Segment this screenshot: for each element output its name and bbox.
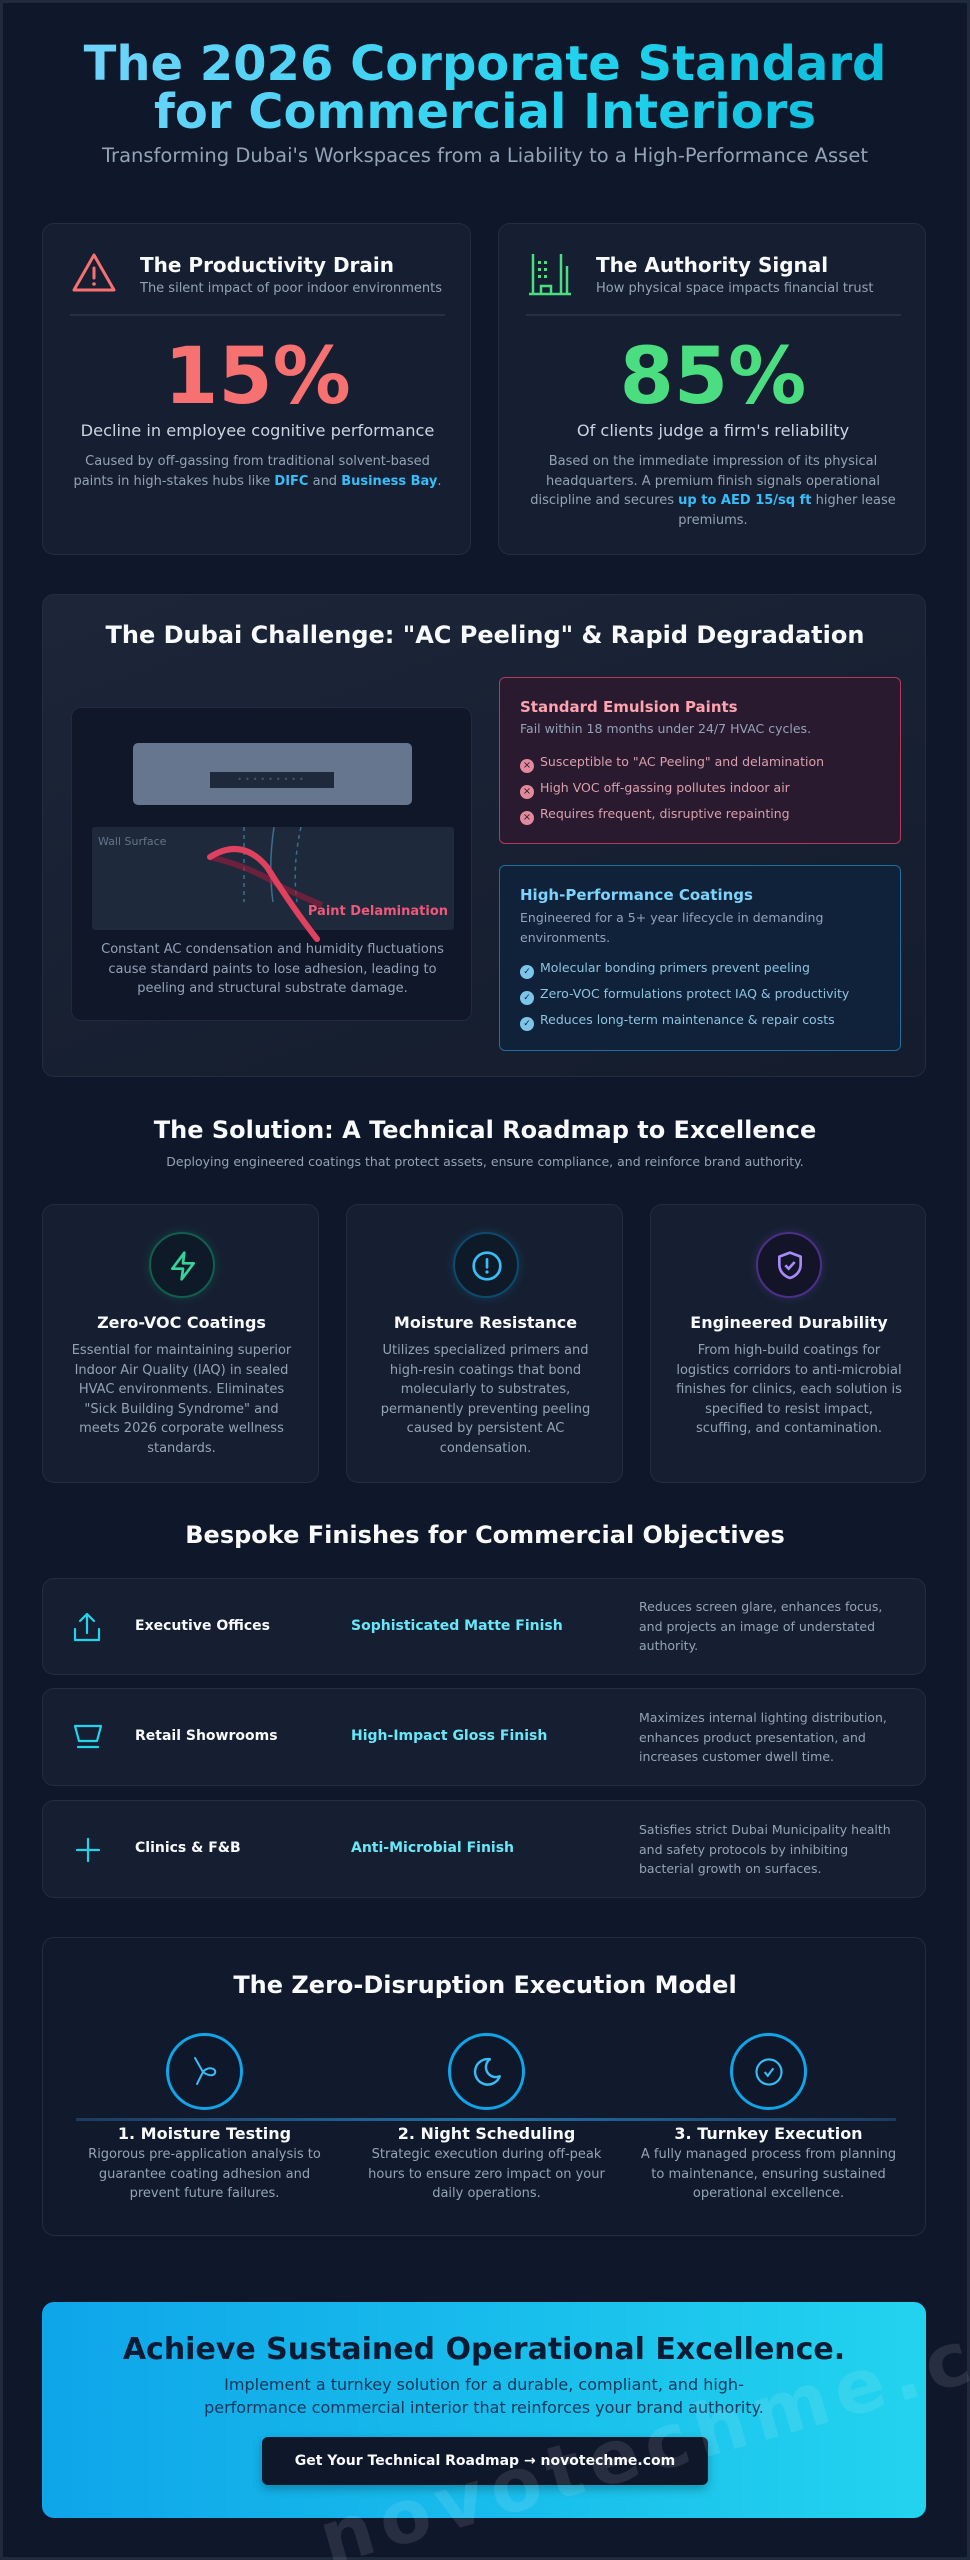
icon: upload: [74, 1612, 100, 1642]
panel: engineered durability: scuffing, and contamination.: [696, 1421, 882, 1436]
icon: warning triangle: [72, 253, 116, 292]
callout: standard emulsion: [499, 677, 901, 844]
button: [262, 2437, 708, 2485]
icon: check circle: [730, 2033, 807, 2110]
callout: standard emulsion: Requires frequent, disruptive repainting: [540, 806, 790, 821]
text block: Implement a turnkey solution for a durable, compliant, and high-: [224, 2375, 744, 2394]
panel: productivity drain: Decline in employee cognitive performance: [81, 421, 434, 440]
callout: high-performance coatings: [499, 865, 901, 1051]
caption: Constant AC condensation and humidity fluctuations: [101, 942, 444, 957]
panel: moisture resistance: molecularly to substrates,: [401, 1382, 570, 1397]
label: paint delamination: Paint Delamination: [308, 904, 448, 919]
panel: moisture resistance: [346, 1204, 623, 1483]
text block: premiums.: [678, 512, 748, 528]
panel: authority signal: How physical space impacts financial trust: [596, 281, 874, 296]
callout: standard emulsion: ×: [523, 760, 531, 771]
wall surface: Wall Surface: [98, 835, 166, 848]
text block: Caused by off-gassing from traditional solvent-based: [85, 454, 430, 469]
step 3: [641, 2033, 896, 2201]
step 1: guarantee coating adhesion and: [99, 2166, 310, 2182]
step 1: prevent future failures.: [130, 2186, 279, 2201]
callout: standard emulsion: Susceptible to "AC Peeling" and delamination: [540, 754, 824, 769]
heading: solution: The Solution: A Technical Roadmap to Excellence: [154, 1116, 816, 1144]
callout: high-performance coatings: High-Performance Coatings: [520, 886, 753, 904]
step 2: hours to ensure zero impact on your: [368, 2166, 605, 2182]
row: clinics: Clinics & F&B: [135, 1840, 241, 1856]
title: [0, 40, 970, 136]
panel: zero-voc: Zero-VOC Coatings: [97, 1313, 266, 1332]
panel: engineered durability: [650, 1204, 926, 1483]
text block: [204, 2375, 764, 2417]
icon: AC unit: [133, 743, 412, 805]
panel: productivity drain: The silent impact of poor indoor environments: [140, 281, 442, 296]
row: executive offices: Executive Offices: [135, 1618, 270, 1634]
text block: [73, 454, 442, 488]
step 1: 1. Moisture Testing: [118, 2124, 291, 2143]
heading: The Productivity Drain: [140, 253, 394, 277]
subtitle: solution: Deploying engineered coatings that protect assets, ensure compliance, and reinforce brand authority.: [166, 1154, 804, 1169]
panel: engineered durability: Engineered Durability: [690, 1313, 888, 1332]
timeline line: [76, 2118, 896, 2121]
callout: standard emulsion: ×: [523, 812, 531, 823]
icon: AC unit: •••••••••: [237, 775, 307, 784]
panel: zero-voc: Essential for maintaining superior: [72, 1343, 291, 1358]
callout: high-performance coatings: Reduces long-term maintenance & repair costs: [540, 1012, 835, 1027]
callout: high-performance coatings: environments.: [520, 930, 610, 945]
callout: high-performance coatings: ✓: [523, 967, 531, 977]
row: clinics: bacterial growth on surfaces.: [639, 1861, 821, 1876]
panel: dubai challenge: [42, 594, 926, 1077]
step 1: [88, 2033, 321, 2201]
row: retail showrooms: [42, 1688, 926, 1786]
illustration: AC peeling: [71, 707, 472, 1021]
panel: execution model: [42, 1937, 926, 2236]
icon: alert circle: [453, 1232, 519, 1298]
text block: [530, 454, 896, 528]
panel: engineered durability: finishes for clinics, each solution is: [676, 1382, 902, 1397]
icon: lightning: [149, 1232, 215, 1298]
row: retail showrooms: increases customer dwell time.: [639, 1749, 834, 1764]
callout: standard emulsion: High VOC off-gassing pollutes indoor air: [540, 780, 790, 795]
row: executive offices: authority.: [639, 1638, 698, 1653]
row: executive offices: [42, 1578, 926, 1675]
step 2: [368, 2033, 605, 2201]
caption: [101, 942, 444, 996]
panel: engineered durability: specified to resist impact,: [705, 1402, 873, 1416]
heading: The Authority Signal: [596, 253, 828, 277]
panel: moisture resistance: permanently preventing peeling: [381, 1402, 590, 1416]
icon: moisture: [166, 2033, 243, 2110]
text block: Based on the immediate impression of its physical: [549, 454, 877, 469]
title: for Commercial Interiors: [154, 84, 816, 140]
text block: headquarters. A premium finish signals operational: [546, 474, 880, 488]
heading: bespoke finishes: Bespoke Finishes for Commercial Objectives: [185, 1521, 785, 1549]
panel: moisture resistance: Utilizes specialized primers and: [383, 1343, 588, 1358]
heading: The Dubai Challenge: "AC Peeling" & Rapid Degradation: [106, 621, 864, 649]
row: retail showrooms: Maximizes internal lighting distribution,: [639, 1710, 887, 1725]
step 2: 2. Night Scheduling: [398, 2124, 575, 2143]
panel: zero-voc: meets 2026 corporate wellness: [79, 1421, 284, 1436]
row: executive offices: and projects an image of understated: [639, 1618, 875, 1634]
panel: zero-voc: standards.: [147, 1440, 216, 1456]
panel: engineered durability: From high-build coatings for: [698, 1343, 880, 1358]
panel: zero-voc: Indoor Air Quality (IAQ) in sealed: [75, 1362, 288, 1378]
text block: performance commercial interior that reinforces your brand authority.: [204, 2398, 764, 2417]
icon: moon: [448, 2033, 525, 2110]
row: clinics: Anti-Microbial Finish: [351, 1840, 514, 1856]
step 3: 3. Turnkey Execution: [674, 2124, 863, 2143]
panel: moisture resistance: condensation.: [440, 1440, 531, 1456]
panel: moisture resistance: caused by persistent AC: [407, 1421, 564, 1436]
callout: standard emulsion: Fail within 18 months under 24/7 HVAC cycles.: [520, 721, 811, 736]
callout: high-performance coatings: Engineered for a 5+ year lifecycle in demanding: [520, 910, 823, 925]
callout: standard emulsion: ×: [523, 786, 531, 797]
row: retail showrooms: Retail Showrooms: [135, 1728, 278, 1744]
button: Get Your Technical Roadmap → novotechme.com: [295, 2453, 675, 2469]
wall surface: [92, 827, 454, 930]
row: clinics: and safety protocols by inhibiting: [639, 1842, 848, 1856]
row: retail showrooms: High-Impact Gloss Finish: [351, 1728, 547, 1744]
callout: standard emulsion: Standard Emulsion Paints: [520, 698, 738, 716]
icon: plus: [76, 1838, 100, 1862]
step 3: to maintenance, ensuring sustained: [651, 2166, 886, 2182]
subtitle: Transforming Dubai's Workspaces from a Liability to a High-Performance Asset: [102, 144, 868, 167]
row: executive offices: Reduces screen glare, enhances focus,: [639, 1599, 882, 1614]
callout: high-performance coatings: ✓: [523, 1019, 531, 1029]
callout: high-performance coatings: Zero-VOC formulations protect IAQ & productivity: [540, 986, 849, 1001]
callout: high-performance coatings: ✓: [523, 993, 531, 1003]
icon: basket: [74, 1724, 102, 1748]
panel: productivity drain: [42, 223, 471, 555]
icon: shield: [756, 1232, 822, 1298]
panel: engineered durability: logistics corridors to anti-microbial: [676, 1362, 902, 1378]
row: clinics: [42, 1800, 926, 1898]
text block: discipline and secures up to AED 15/sq ft higher lease: [530, 493, 896, 508]
panel: zero-voc: "Sick Building Syndrome" and: [84, 1402, 279, 1416]
heading: Achieve Sustained Operational Excellence.: [123, 2332, 845, 2367]
caption: cause standard paints to lose adhesion, leading to: [108, 962, 437, 976]
panel: authority signal: [498, 223, 926, 555]
callout: high-performance coatings: Molecular bonding primers prevent peeling: [540, 960, 810, 975]
icon: building: [529, 254, 571, 296]
text block: paints in high-stakes hubs like DIFC and Business Bay.: [73, 474, 442, 488]
row: clinics: Satisfies strict Dubai Municipality health: [639, 1822, 891, 1837]
panel: moisture resistance: high-resin coatings that bond: [390, 1362, 581, 1378]
row: executive offices: Sophisticated Matte Finish: [351, 1618, 563, 1634]
step 2: Strategic execution during off-peak: [372, 2147, 601, 2162]
step 3: operational excellence.: [693, 2186, 844, 2201]
title: The 2026 Corporate Standard: [84, 36, 886, 92]
step 3: A fully managed process from planning: [641, 2147, 896, 2162]
heading: The Zero-Disruption Execution Model: [233, 1971, 737, 1999]
panel: moisture resistance: Moisture Resistance: [394, 1313, 577, 1332]
step 1: Rigorous pre-application analysis to: [88, 2147, 321, 2162]
stat: 15%: 15%: [164, 332, 351, 422]
panel: zero-voc: HVAC environments. Eliminates: [79, 1382, 284, 1397]
panel: authority signal: Of clients judge a firm's reliability: [577, 421, 849, 440]
row: retail showrooms: enhances product presentation, and: [639, 1730, 866, 1744]
stat: 85%: 85%: [620, 332, 806, 422]
panel: zero-voc: [42, 1204, 319, 1483]
step 2: daily operations.: [432, 2186, 541, 2201]
caption: peeling and structural substrate damage.: [137, 981, 408, 996]
panel: CTA: [42, 2302, 926, 2518]
